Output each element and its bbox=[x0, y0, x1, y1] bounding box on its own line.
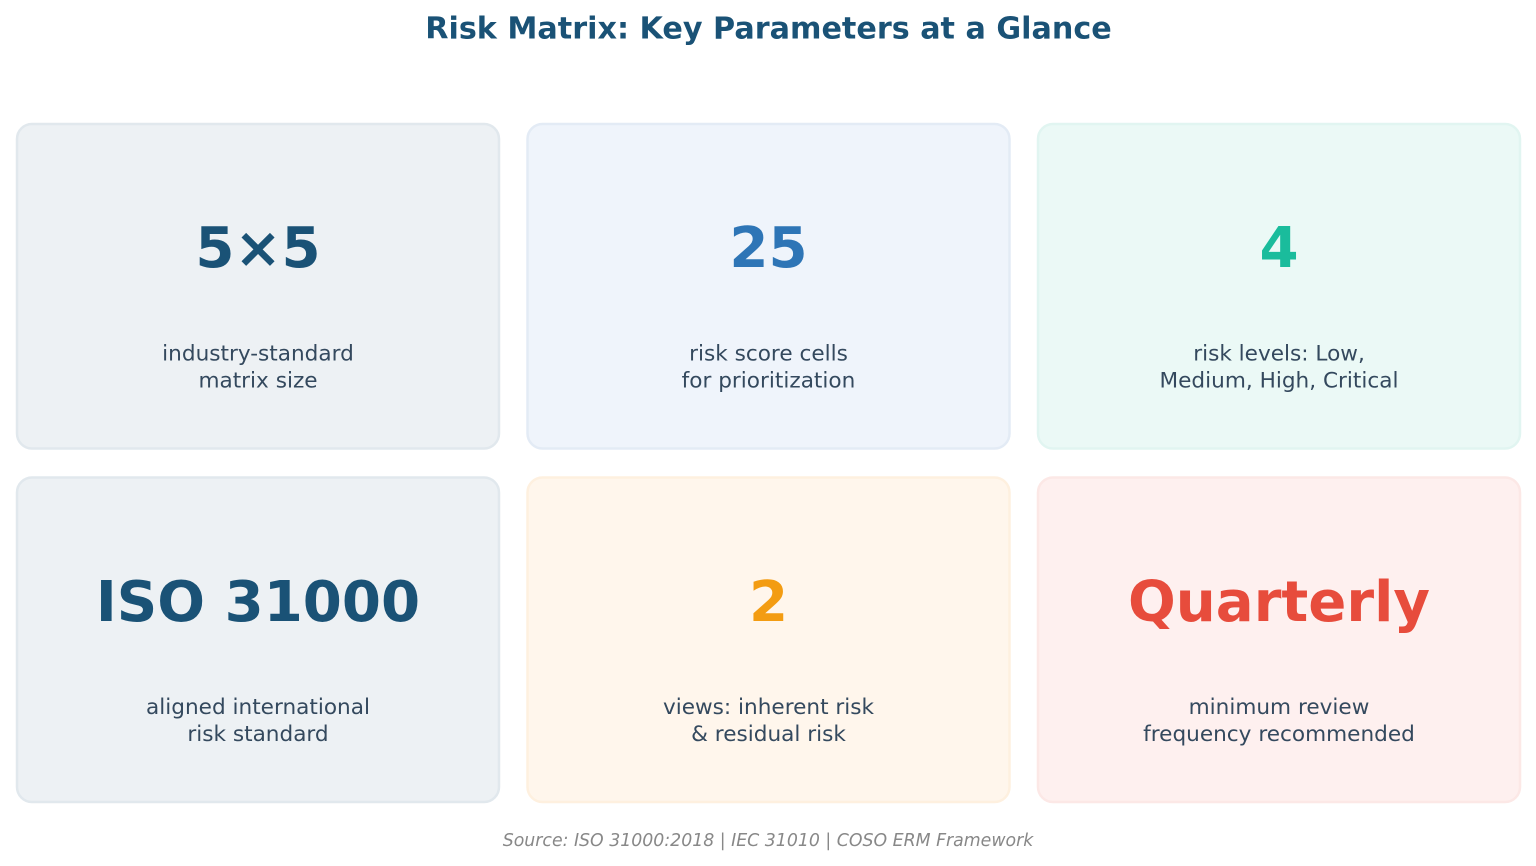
title: Risk Matrix: Key Parameters at a Glance bbox=[425, 12, 1112, 46]
label: views: & residual risk bbox=[691, 722, 846, 747]
label: review frequency: minimum review bbox=[1189, 695, 1369, 720]
label: views: views: inherent risk bbox=[663, 695, 875, 720]
value: 5x5: 5×5 bbox=[195, 216, 321, 281]
source note: Source: ISO 31000:2018 | IEC 31010 | COSO ERM Framework bbox=[503, 831, 1034, 851]
value: Quarterly: Quarterly bbox=[1128, 570, 1430, 635]
label: risk levels: risk levels: Low, bbox=[1193, 342, 1365, 366]
value: ISO 31000: ISO 31000 bbox=[96, 570, 420, 635]
label: ISO standard: aligned international bbox=[146, 695, 370, 720]
value: 4: 4 bbox=[1259, 216, 1299, 281]
label: score cells: risk score cells bbox=[689, 342, 848, 366]
label: ISO standard: risk standard bbox=[187, 722, 329, 747]
label: risk levels: Medium, High, Critical bbox=[1160, 368, 1398, 394]
value: 25: 25 bbox=[729, 216, 808, 281]
panel: matrix size bbox=[17, 124, 499, 448]
panel: risk levels bbox=[1038, 124, 1520, 448]
label: matrix size: industry-standard bbox=[162, 342, 354, 366]
panel: score cells bbox=[528, 124, 1010, 448]
value: 2: 2 bbox=[749, 570, 788, 635]
label: score cells: for prioritization bbox=[682, 368, 855, 394]
panel: review frequency bbox=[1038, 478, 1520, 802]
panel: views bbox=[528, 478, 1010, 802]
label: matrix size: matrix size bbox=[198, 368, 318, 394]
panel: ISO standard bbox=[17, 478, 499, 802]
label: review frequency: frequency recommended bbox=[1143, 722, 1415, 747]
